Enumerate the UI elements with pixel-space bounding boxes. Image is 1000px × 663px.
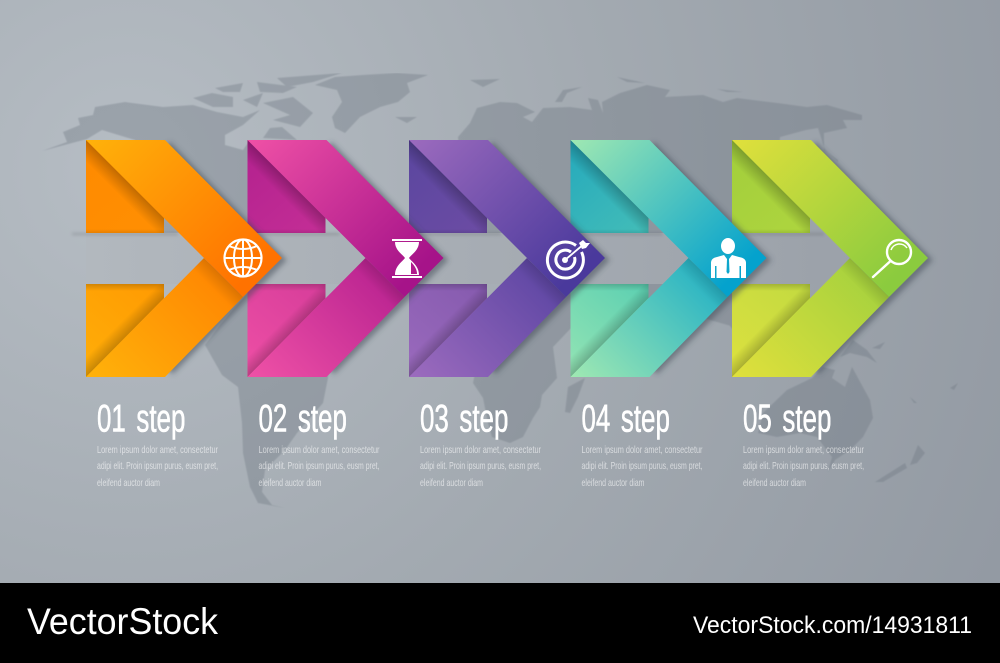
icon: hourglass — [392, 239, 422, 278]
body text: eleifend auctor diam — [97, 477, 160, 489]
body text: Lorem ipsum dolor amet, consectetur — [582, 444, 703, 456]
body text: adipi elit. Proin ipsum purus, eusm pret, — [743, 460, 864, 472]
step 4 text — [582, 397, 703, 489]
arrow 4 — [556, 140, 772, 377]
step 1 text — [97, 397, 218, 489]
body text — [97, 444, 218, 489]
body text: adipi elit. Proin ipsum purus, eusm pret, — [582, 460, 702, 472]
arrow 1 — [72, 140, 287, 377]
body text — [743, 444, 864, 489]
footer logo: VectorStock — [27, 601, 218, 642]
footer url: VectorStock.com/14931811 — [693, 612, 972, 639]
arrow 2 — [234, 140, 448, 377]
heading: 05 step: 05 step — [743, 397, 831, 441]
body text: Lorem ipsum dolor amet, consectetur — [258, 444, 380, 456]
body text — [582, 444, 703, 489]
step 2 text — [258, 397, 380, 489]
icon: person — [711, 238, 746, 278]
heading: 04 step: 04 step — [582, 397, 670, 441]
body text: eleifend auctor diam — [258, 477, 322, 489]
grey horizontal band — [86, 233, 866, 284]
arrow 3 — [395, 140, 610, 377]
heading: 03 step: 03 step — [420, 397, 508, 441]
body text: Lorem ipsum dolor amet, consectetur — [743, 444, 864, 456]
world map — [42, 73, 958, 508]
body text — [258, 444, 380, 489]
heading: 01 step: 01 step — [97, 397, 185, 441]
body text: Lorem ipsum dolor amet, consectetur — [97, 444, 218, 456]
footer bar — [0, 583, 1000, 663]
body text: eleifend auctor diam — [420, 477, 483, 489]
icon: magnifier — [873, 240, 911, 277]
body text: eleifend auctor diam — [743, 477, 806, 489]
arrow 5 — [718, 140, 933, 377]
body text: adipi elit. Proin ipsum purus, eusm pret, — [420, 460, 541, 472]
step 5 text — [743, 397, 864, 489]
body text: adipi elit. Proin ipsum purus, eusm pret, — [97, 460, 218, 472]
body text: adipi elit. Proin ipsum purus, eusm pret, — [258, 460, 380, 472]
body text — [420, 444, 541, 489]
step 3 text — [420, 397, 541, 489]
body text: Lorem ipsum dolor amet, consectetur — [420, 444, 541, 456]
heading: 02 step: 02 step — [258, 397, 347, 441]
icon: globe — [224, 240, 262, 276]
body text: eleifend auctor diam — [582, 477, 645, 489]
icon: target — [547, 240, 590, 278]
